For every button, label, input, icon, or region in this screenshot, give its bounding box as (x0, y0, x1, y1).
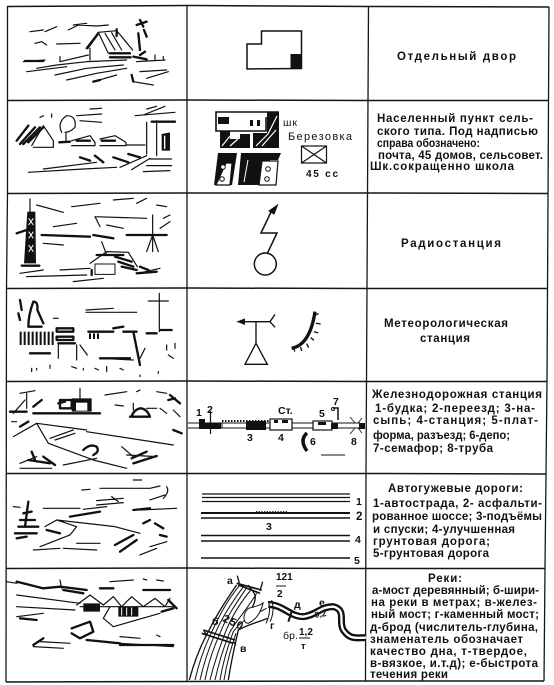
row 6: road map symbols: 5 (354, 555, 360, 567)
row 7: caption: Реки: (428, 573, 462, 585)
row 5: railway station map symbol: 4 (278, 432, 284, 444)
row 2: caption: Населенный пункт сель- (377, 113, 533, 125)
row 6: road map symbols: 2 (356, 511, 362, 523)
icon: hachured arc (292, 312, 321, 352)
row 6: caption: 1-автострада, 2- асфальти- (373, 498, 542, 510)
row 6: country road illustration (13, 480, 177, 555)
river labels: г (270, 620, 275, 632)
row 4: weather station map symbols (237, 312, 321, 364)
row 2: caption (370, 113, 543, 173)
row 1: farmstead illustration (23, 20, 168, 85)
row 7: caption: качество дна, т-твердое, (370, 646, 527, 658)
row 2: caption: Шк.сокращенно школа (370, 161, 515, 173)
row 7: bridge illustration (7, 579, 177, 648)
row 3: caption: Радиостанция (401, 238, 501, 250)
row 6: caption: грунтовая дорога; (373, 536, 490, 548)
row 6: caption: рованное шоссе; 3-подъёмы (372, 511, 542, 523)
row 7: caption: течения реки (370, 669, 448, 681)
river labels: 0,2 (314, 608, 327, 620)
river labels: 2 (277, 589, 283, 600)
row 2: caption: почта, 45 домов, сельсовет. (378, 150, 543, 162)
row 5: caption (371, 389, 542, 455)
row 5: railway station illustration (10, 388, 182, 468)
river labels (212, 572, 327, 655)
row 6: road map symbols (201, 494, 362, 567)
row 6: caption: Автогужевые дороги: (388, 483, 523, 495)
row 6: road map symbols: 3 (266, 521, 272, 533)
river labels: 121 (276, 572, 293, 583)
row 1: caption: Отдельный двор (397, 51, 516, 63)
row 5: railway station map symbol: 3 (247, 432, 253, 444)
row 6: road map symbols: 1 (356, 496, 362, 508)
row 4: caption (384, 318, 508, 345)
row 3: radio station illustration (17, 198, 170, 282)
row 4: weather station illustration (18, 293, 175, 377)
row 5: railway station map symbol: 1 (196, 407, 202, 419)
row 4: caption: станция (420, 333, 470, 345)
row 7: caption: на реки в метрах; в-желез- (371, 597, 537, 609)
river labels: е (319, 597, 325, 609)
row 7: caption: ный мост; г-каменный мост; (371, 609, 539, 621)
river labels: 1,2 (299, 627, 313, 638)
row 5: caption: 1-будка; 2-переезд; 3-на- (375, 403, 535, 415)
row 1: single farmstead map symbol (247, 31, 302, 69)
row 7: caption: знаменатель обозначает (370, 634, 523, 646)
river labels: а (227, 575, 233, 587)
row 2: settlement plan symbol (214, 112, 353, 185)
row 7: river map symbol (189, 576, 366, 680)
row 6: caption: и спуски; 4-улучшенная (373, 524, 515, 536)
row 3: radio station map symbol (254, 205, 278, 275)
row 2: settlement plan symbol: шк (283, 117, 297, 129)
row 5: railway station map symbol: 6 (310, 436, 316, 448)
row 7: caption: в-вязкое, и.т.д); е-быстрота (370, 658, 539, 670)
row 5: caption: 7-семафор; 8-труба (373, 443, 494, 455)
row 2: settlement plan symbol: Березовка (288, 131, 353, 143)
row 6: caption: 5-грунтовая дорога (373, 548, 490, 560)
tributary (266, 600, 366, 638)
row 5: caption: форма, разъезд; 6-депо; (373, 430, 510, 442)
row 2: settlement plan symbol: 45 сс (306, 169, 338, 180)
river labels: в (240, 643, 247, 655)
row 6: caption (372, 483, 542, 560)
row 7: caption: д-брод (числитель-глубина, (370, 622, 538, 634)
main river channel (189, 576, 267, 680)
row 5: caption: сыпь; 4-станция; 5-плат- (373, 415, 538, 427)
row 5: railway station map symbol: 5 (319, 408, 325, 420)
row 5: railway station map symbol: 2 (207, 404, 213, 416)
river labels: д (294, 599, 301, 611)
river labels: 250 (221, 613, 245, 633)
row 7: caption (370, 573, 539, 681)
row 5: railway station map symbol: 7 (333, 396, 339, 408)
row 6: road map symbols: 4 (355, 534, 361, 546)
river labels: б (212, 616, 219, 628)
river labels: т (301, 641, 306, 652)
river labels: бр. (283, 630, 298, 642)
row 5: caption: Железнодорожная станция (371, 389, 542, 401)
icon: wind vane with triangle (237, 314, 275, 364)
row 5: railway station map symbol: Ст. (278, 405, 293, 417)
row 5: railway station map symbol: 8 (351, 436, 357, 448)
row 7: caption: а-мост деревянный; б-шири- (372, 585, 539, 597)
row 4: caption: Метеорологическая (384, 318, 508, 330)
row 2: caption: справа обозначено: (377, 138, 480, 150)
row 2: caption: ского типа. Под надписью (377, 126, 538, 138)
row 5: railway station map symbol (188, 396, 365, 455)
row 2: rural settlement illustration (17, 106, 175, 172)
